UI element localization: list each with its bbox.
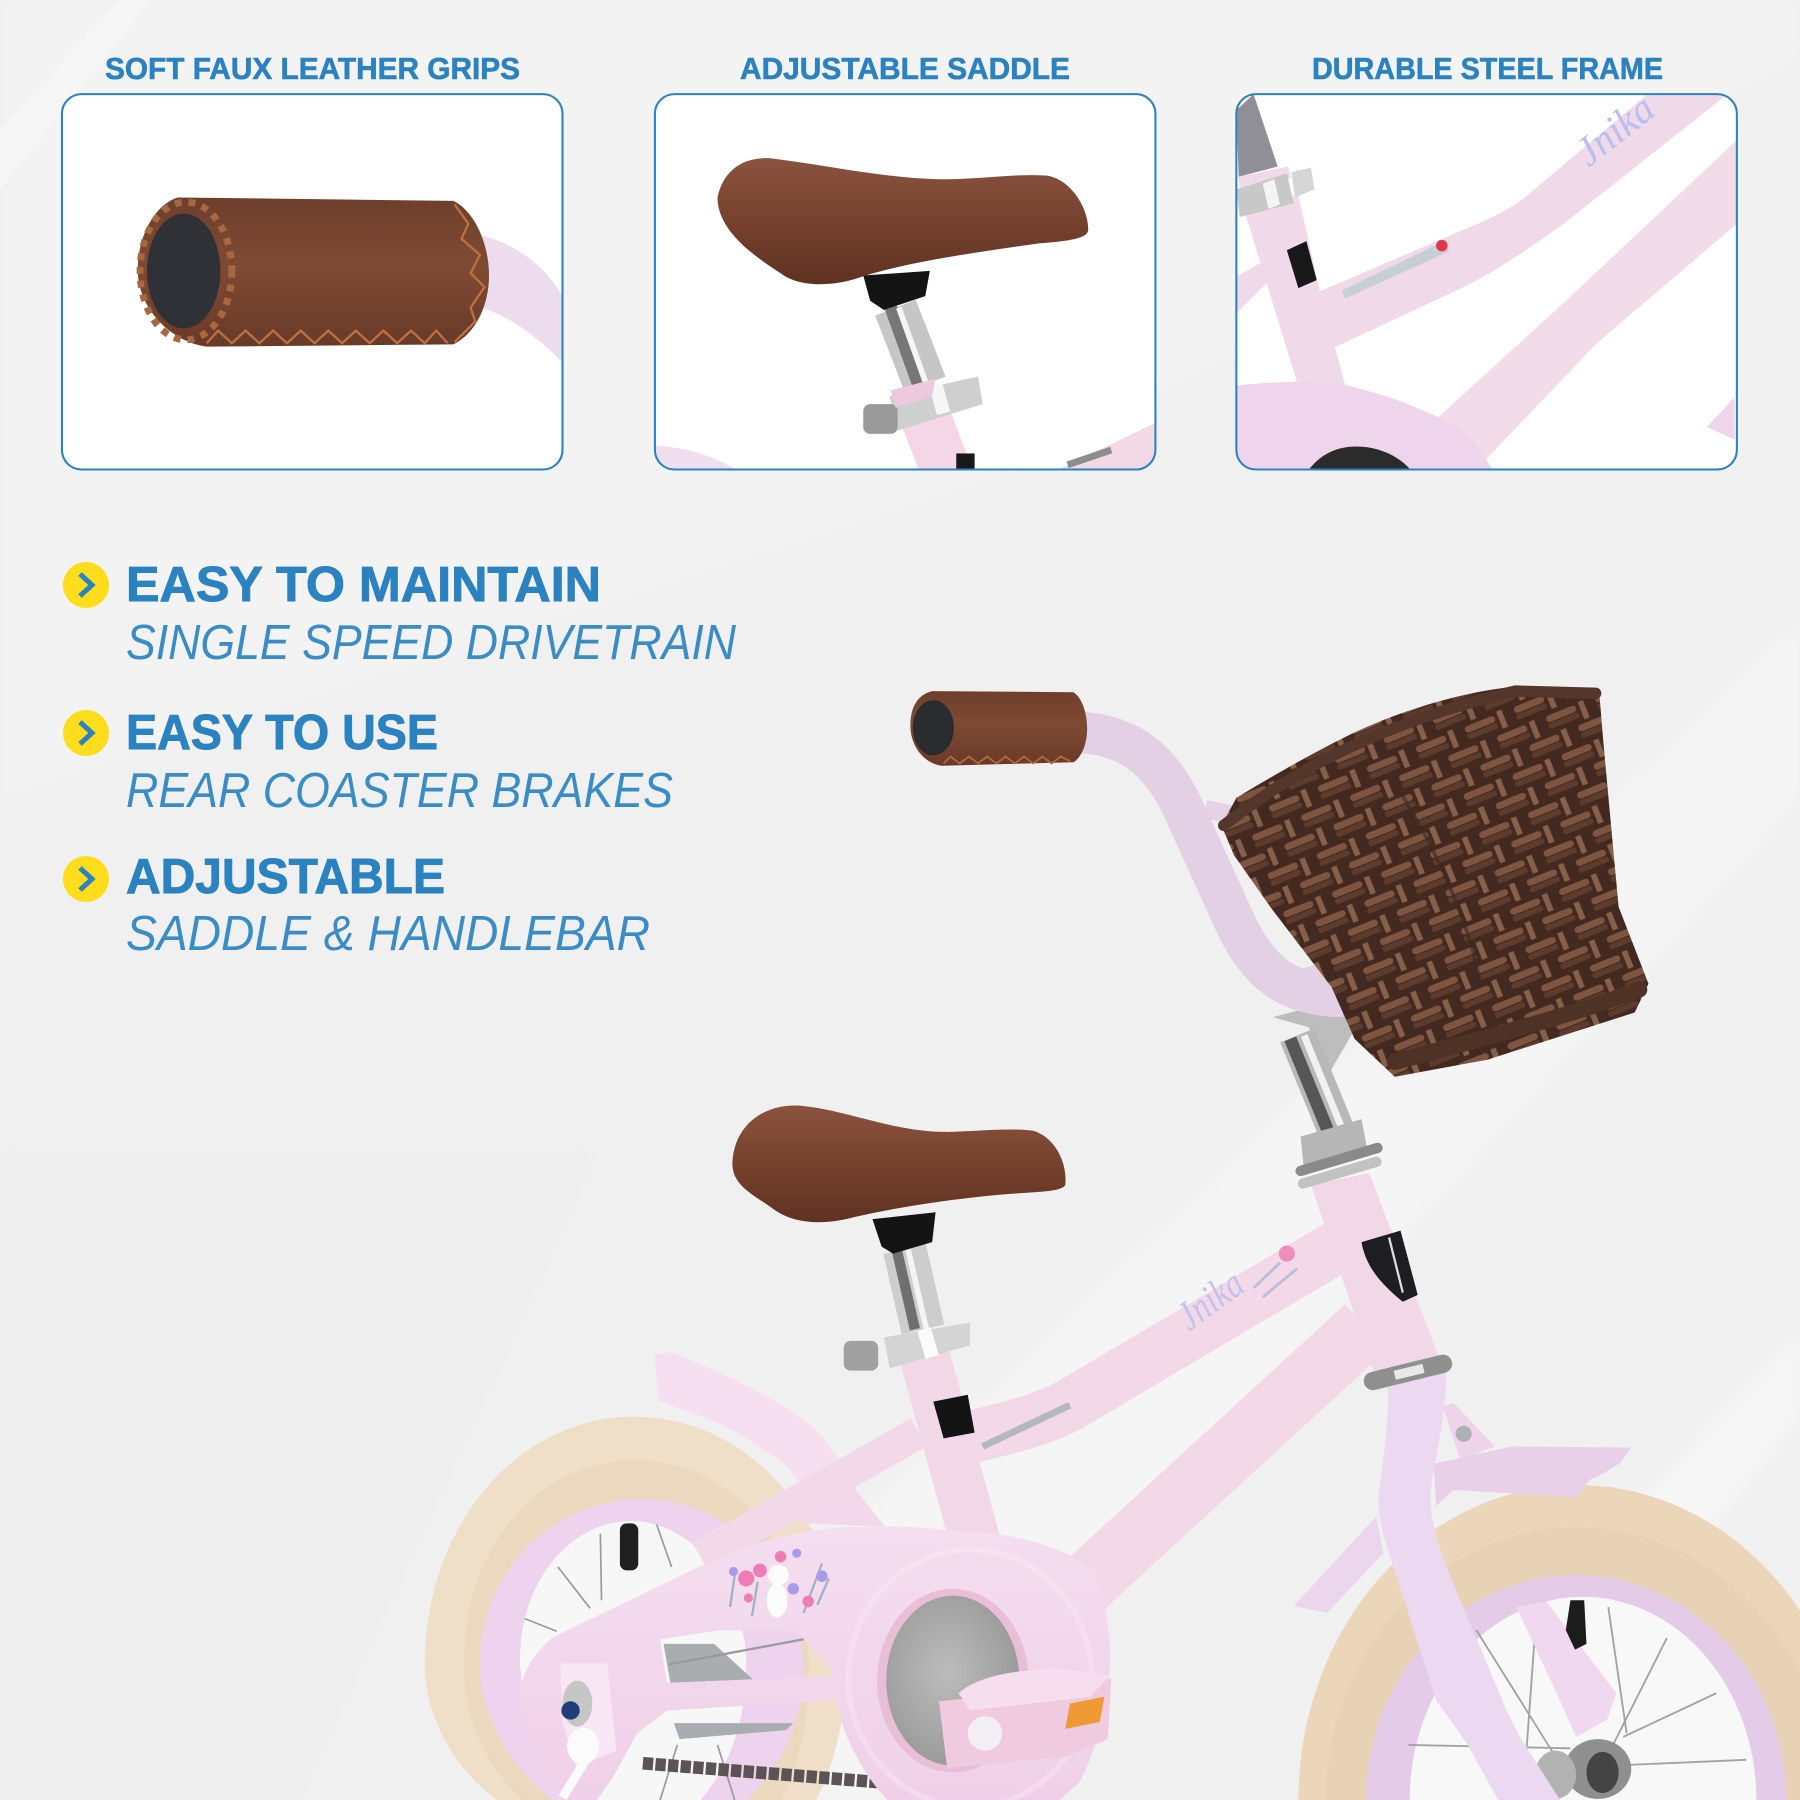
- gear and chain behind guard: [643, 1639, 886, 1783]
- floral decal: [729, 1549, 829, 1617]
- rear wheel: [425, 1417, 846, 1800]
- top tube: [936, 1240, 1349, 1449]
- frame sticker: [983, 1405, 1070, 1446]
- seat clamp: [844, 1322, 970, 1371]
- panel: frame card: [1236, 85, 1737, 473]
- guard ring highlight: [848, 1550, 1092, 1800]
- bullet 1: [63, 562, 109, 608]
- card heading: soft faux leather grips: SOFT FAUX LEATHER GRIPS: [105, 51, 520, 86]
- lower headset ring: [1373, 1364, 1443, 1381]
- down tube: [1423, 140, 1737, 471]
- top tube: [1309, 90, 1733, 356]
- feature 3 title: ADJUSTABLE: [126, 850, 445, 904]
- frame fragments: [656, 446, 734, 468]
- front hub: [1535, 1739, 1631, 1799]
- panel: saddle card: [654, 94, 1156, 473]
- saddle: [732, 1105, 1066, 1222]
- card heading: adjustable saddle: ADJUSTABLE SADDLE: [740, 51, 1070, 86]
- head badge: [1361, 1231, 1418, 1302]
- pedal: [939, 1669, 1111, 1768]
- handlebar tube: [480, 235, 565, 365]
- fork: [1379, 1366, 1560, 1800]
- seat post: [897, 1249, 926, 1329]
- script logo: Jnika: [1566, 85, 1663, 175]
- seat stay: [700, 1433, 918, 1557]
- chain guard: [520, 1526, 1110, 1800]
- wicker basket: [1221, 686, 1648, 1077]
- mudguard: [1236, 382, 1493, 473]
- front wheel: [1298, 1485, 1800, 1800]
- handlebar: [1079, 732, 1349, 996]
- seat tube: [1243, 195, 1347, 390]
- seat post: [1236, 94, 1278, 177]
- saddle clamp: [863, 271, 930, 310]
- down tube: [1073, 1327, 1366, 1596]
- collar clamp: [1236, 166, 1314, 217]
- seat clamp: [863, 377, 983, 434]
- card heading: durable steel frame: DURABLE STEEL FRAME: [1312, 51, 1663, 86]
- head tube: [1311, 1173, 1441, 1383]
- seat stay: [1238, 263, 1266, 312]
- feature 2 title: EASY TO USE: [126, 706, 438, 760]
- large leather grip: [138, 197, 489, 347]
- front mudguard: [1294, 1446, 1631, 1613]
- saddle clamp: [872, 1212, 936, 1254]
- feature 2 detail: REAR COASTER BRAKES: [126, 764, 673, 818]
- feature list: [63, 558, 737, 961]
- feature 3 detail: SADDLE & HANDLEBAR: [126, 907, 650, 961]
- seat post: [891, 308, 926, 385]
- guard disc hole: [877, 1589, 1029, 1772]
- guard plate and axle: [560, 1663, 616, 1798]
- sticker: [1342, 240, 1449, 298]
- handlebar grip: [910, 691, 1087, 766]
- stem: [1273, 999, 1359, 1134]
- feature 1 detail: SINGLE SPEED DRIVETRAIN: [126, 616, 737, 670]
- black label: [1287, 241, 1317, 288]
- front fork rear bracket: [1443, 1403, 1495, 1460]
- seat tube: [924, 1355, 978, 1552]
- fork crown bolt: [1456, 1426, 1472, 1442]
- bullet 2: [63, 710, 109, 756]
- label on seat tube: [933, 1395, 975, 1438]
- saddle: [717, 158, 1088, 284]
- rear mudguard: [654, 1352, 838, 1492]
- rear fragment: [1707, 397, 1735, 440]
- top tube script logo: Jnika: [1168, 1260, 1252, 1339]
- bullet 3: [63, 856, 109, 902]
- headset nut and washers: [1301, 1119, 1378, 1184]
- panel: grips card: [62, 94, 565, 470]
- seat tube: [922, 408, 947, 473]
- feature 1 title: EASY TO MAINTAIN: [126, 558, 601, 612]
